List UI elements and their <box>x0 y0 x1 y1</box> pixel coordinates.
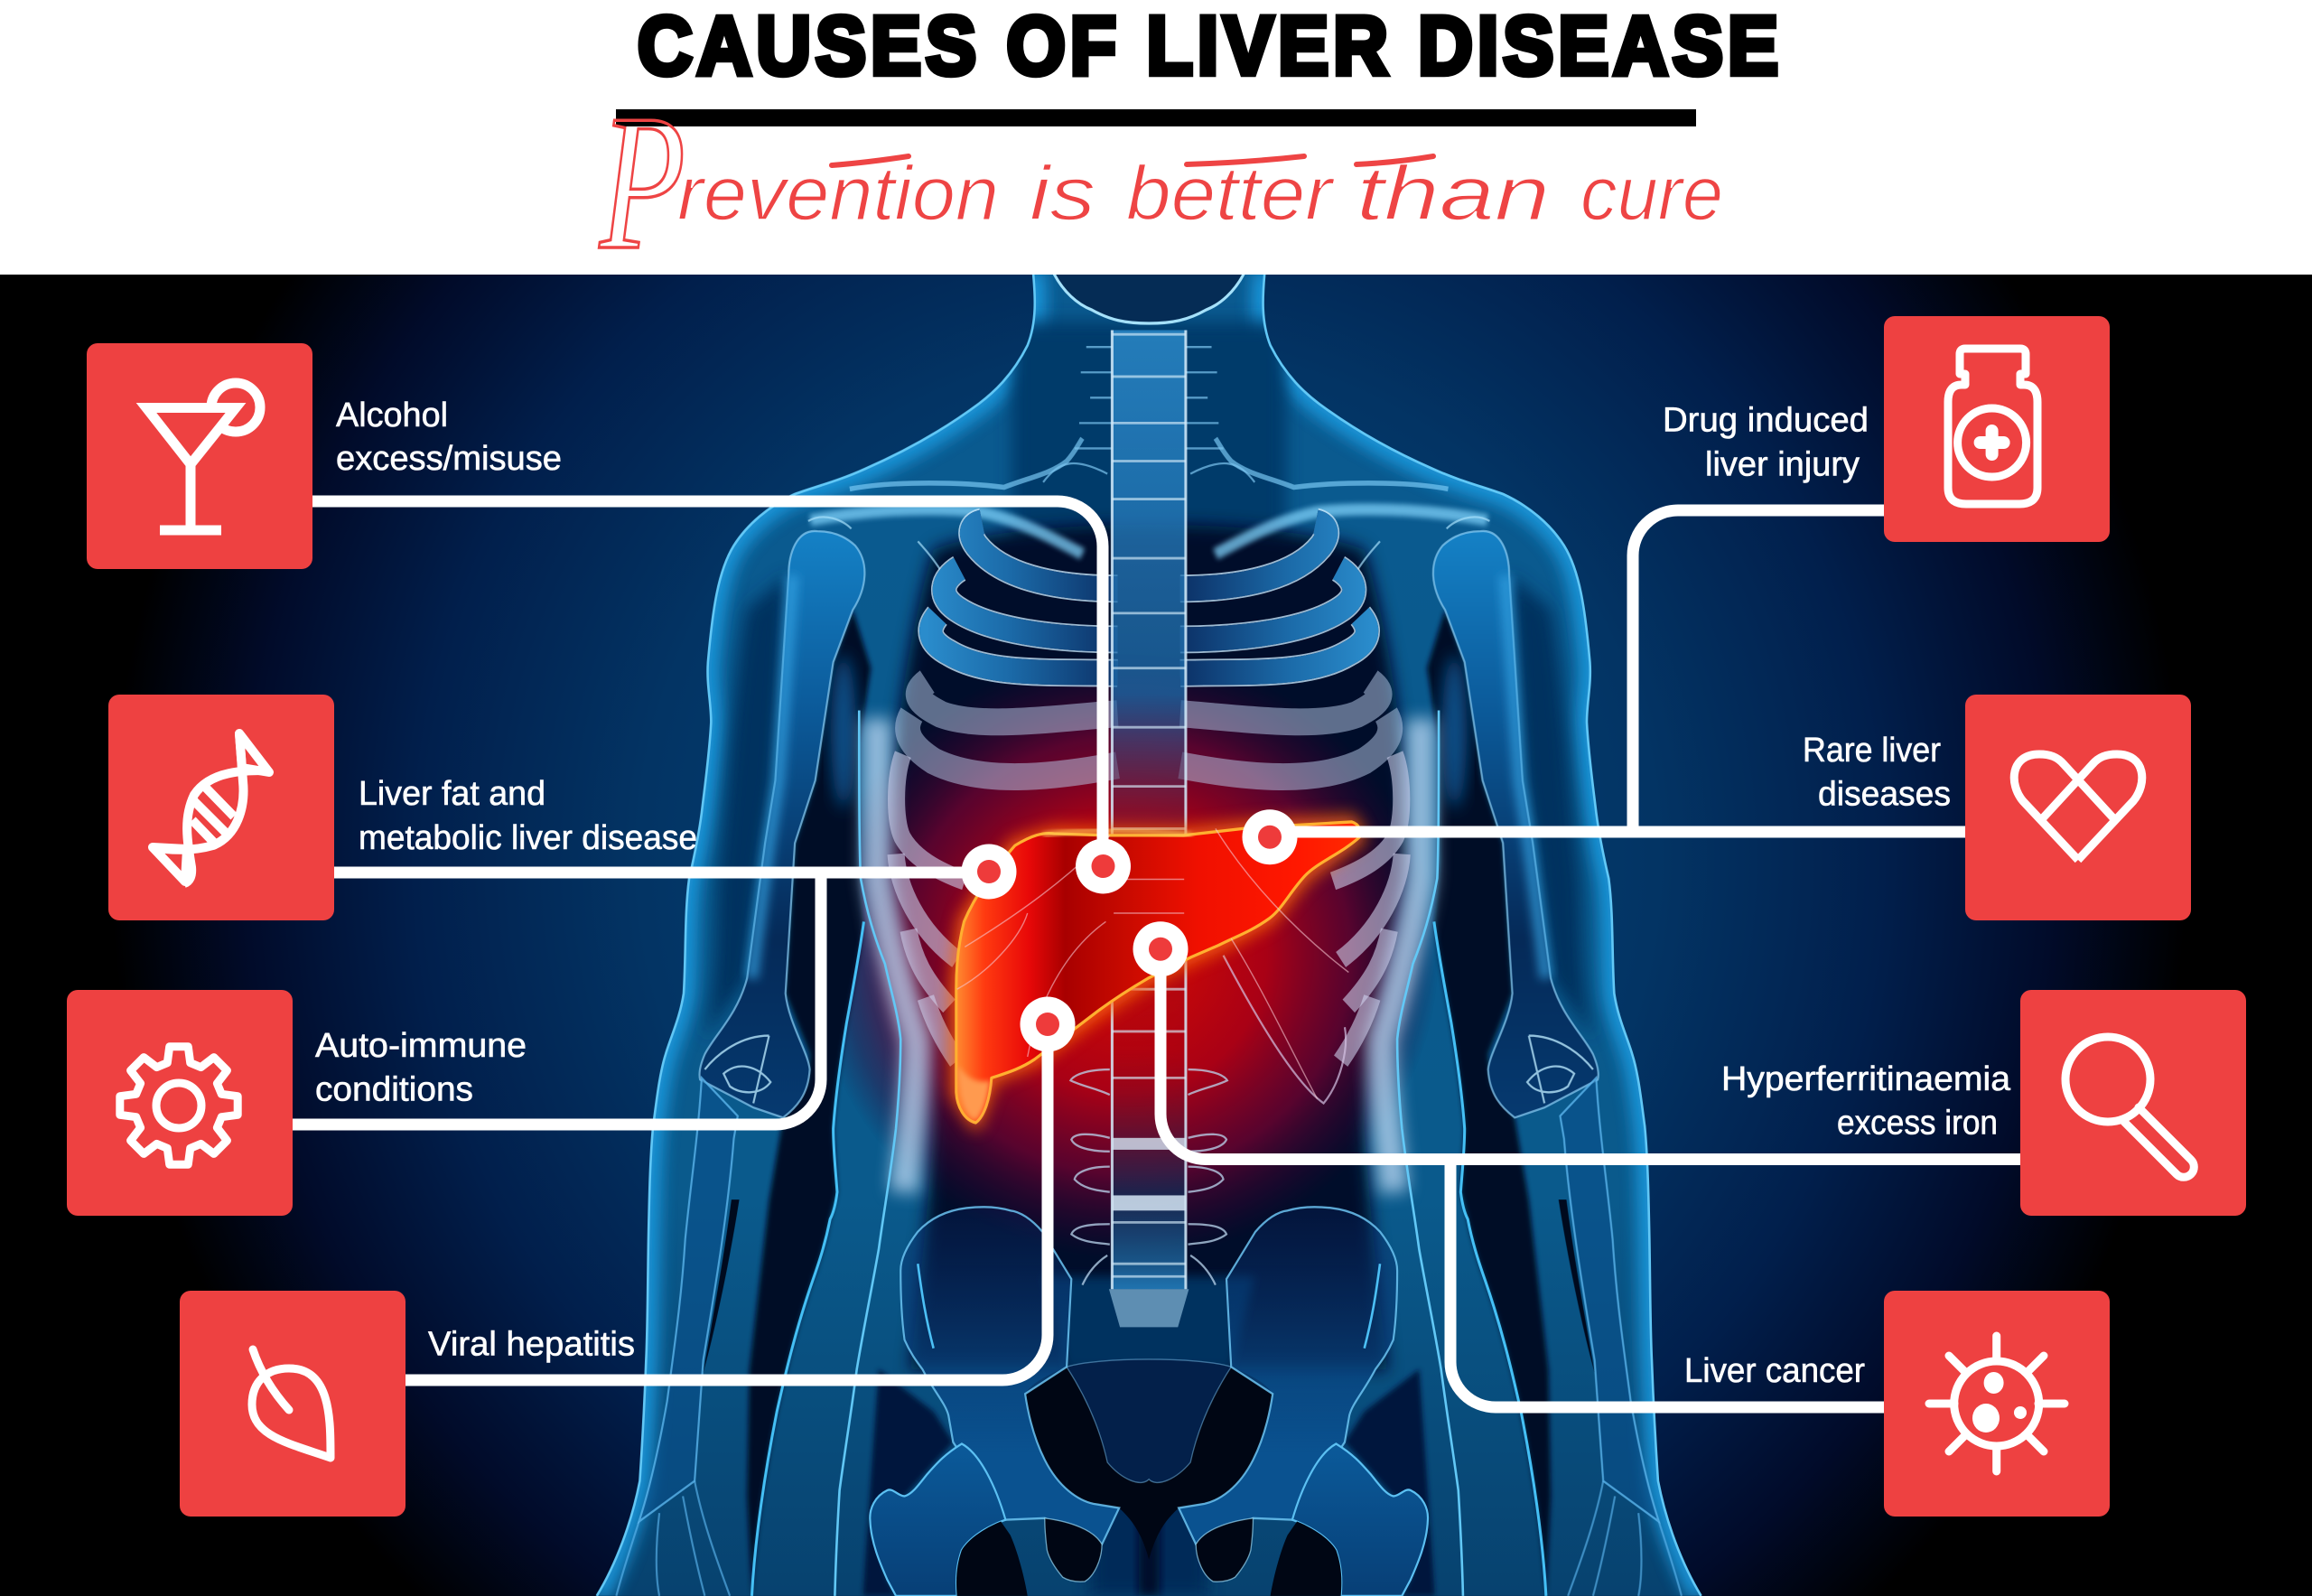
label: hyperferritinaemia <box>1721 1060 2011 1142</box>
connector: rare diseases <box>1270 826 1965 838</box>
title rule <box>616 109 1696 126</box>
panel: drug induced <box>1663 316 2110 542</box>
icon: cocktail glass <box>146 383 260 530</box>
label: alcohol: Alcohol <box>336 397 448 434</box>
label: alcohol <box>336 397 562 478</box>
title: CAUSES OF LIVER DISEASE <box>638 0 1778 92</box>
liver veins <box>957 828 1348 1099</box>
spine <box>1109 330 1189 1327</box>
liver <box>956 822 1360 1123</box>
panel: auto-immune <box>67 990 527 1216</box>
panel: viral hepatitis <box>180 1291 635 1517</box>
icon: virus cell <box>1929 1336 2065 1471</box>
label: rare diseases: diseases <box>1818 776 1951 814</box>
label: hyperferritinaemia: Hyperferritinaemia <box>1721 1060 2011 1098</box>
connector: drug induced <box>1633 510 1884 832</box>
label: hyperferritinaemia: excess iron <box>1837 1104 1998 1142</box>
label: rare diseases <box>1803 732 1951 814</box>
connector: viral hepatitis <box>406 1024 1048 1380</box>
central pelvic opening <box>1025 1359 1273 1560</box>
label: liver fat: metabolic liver disease <box>359 819 697 857</box>
panel: liver cancer <box>1684 1291 2110 1517</box>
pelvis and hips <box>863 347 1435 1596</box>
torso side bands <box>877 719 1421 1192</box>
marker: lower left <box>1021 997 1075 1051</box>
arms, shoulder bones and collarbones <box>616 438 1682 1596</box>
label: liver cancer: Liver cancer <box>1684 1352 1865 1390</box>
icon: heart <box>2014 754 2142 860</box>
label: rare diseases: Rare liver <box>1803 732 1941 770</box>
subtitle: cure <box>1580 152 1723 237</box>
label: drug induced <box>1663 401 1869 484</box>
red glow around liver <box>842 685 1432 1246</box>
connector: liver fat <box>334 867 989 878</box>
chin and jaw <box>1052 271 1245 323</box>
anatomical body illustration <box>597 271 1701 1596</box>
label: auto-immune: conditions <box>315 1071 473 1109</box>
connector: alcohol <box>312 501 1103 866</box>
icon: magnifying glass <box>2065 1037 2194 1177</box>
marker: right lobe <box>1243 809 1297 864</box>
subtitle: better <box>1126 152 1336 237</box>
panel: alcohol <box>87 343 562 569</box>
connector: auto-immune <box>293 873 821 1125</box>
marker: centre lower <box>1133 921 1189 976</box>
label: drug induced: liver injury <box>1705 446 1860 484</box>
label: liver fat <box>359 775 697 857</box>
subtitle: than <box>1356 152 1550 237</box>
subtitle <box>599 74 1723 290</box>
icon: DNA helix <box>152 733 269 883</box>
panel: hyperferritinaemia <box>1721 990 2246 1216</box>
connector: liver cancer <box>1450 1159 1884 1407</box>
icon: medicine bottle <box>1948 349 2037 504</box>
subtitle: revention <box>677 152 999 237</box>
body silhouette <box>597 271 1701 1596</box>
subtitle: P <box>599 74 685 290</box>
panel: rare diseases <box>1803 695 2191 920</box>
panel: liver fat <box>108 695 697 920</box>
label: auto-immune: Auto-immune <box>315 1027 527 1065</box>
sacrum <box>1067 1359 1231 1482</box>
subtitle: is <box>1030 152 1095 237</box>
label: auto-immune <box>315 1027 527 1109</box>
header background <box>0 0 2312 275</box>
marker: left lobe <box>961 844 1017 900</box>
label: liver fat: Liver fat and <box>359 775 545 813</box>
marker: centre top <box>1076 838 1131 894</box>
label: viral hepatitis: Viral hepatitis <box>428 1326 635 1364</box>
label: alcohol: excess/misuse <box>336 440 562 478</box>
icon: gear <box>120 1047 238 1164</box>
label: drug induced: Drug induced <box>1663 401 1869 439</box>
connector: hyperferritinaemia <box>1161 948 2020 1160</box>
outlines <box>597 271 1701 1596</box>
rib cage <box>896 522 1402 1103</box>
icon: leaf <box>252 1349 331 1458</box>
